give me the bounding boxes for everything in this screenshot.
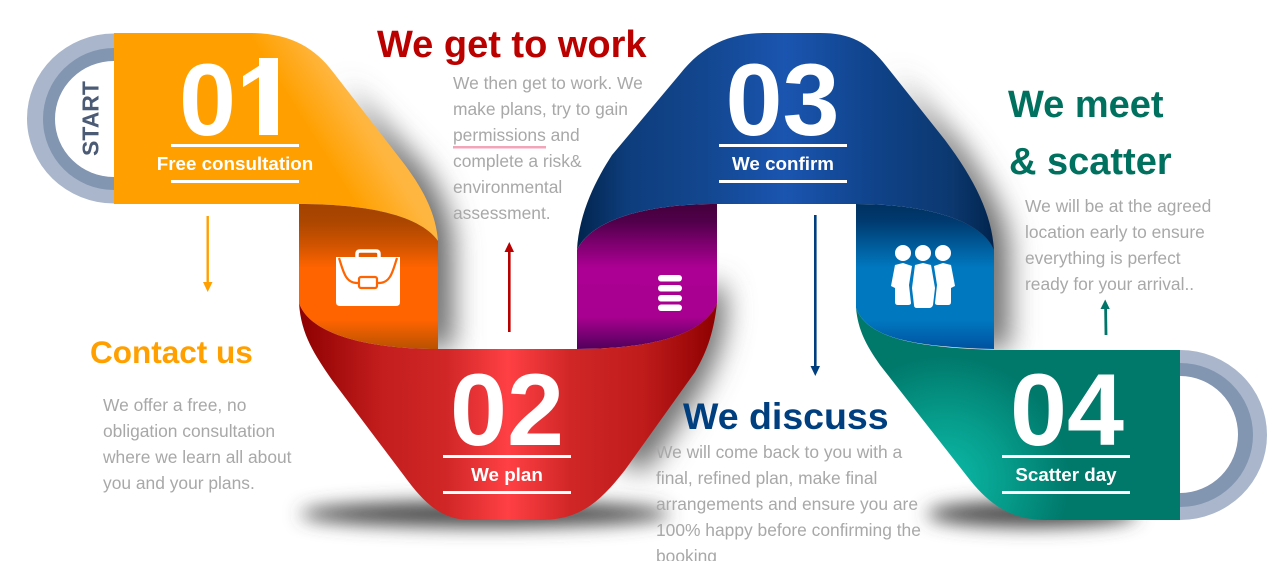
icon: list: [658, 275, 682, 311]
text: contact us body: [102, 395, 292, 493]
heading: we meet & scatter: We meet: [1008, 84, 1164, 126]
text: we get to work body: [453, 73, 643, 223]
text: we meet body: location early to ensure: [1025, 222, 1205, 242]
label: we confirm: We confirm: [732, 153, 834, 174]
number: 01: 01: [179, 42, 293, 157]
heading: contact us: Contact us: [90, 334, 253, 370]
text: contact us body: where we learn all about: [102, 447, 292, 467]
label: start: START: [78, 81, 104, 156]
band: 01 orange: [114, 33, 438, 241]
text: we get to work body: complete a risk&: [453, 151, 582, 171]
fold: blue with people icon: [856, 204, 994, 349]
text: we discuss body: final, refined plan, make final: [656, 468, 877, 488]
numeral one: plain stem: [238, 58, 296, 136]
text: we get to work body: assessment.: [453, 203, 551, 223]
heading: we discuss: We discuss: [683, 395, 889, 437]
heading: we meet & scatter: & scatter: [1009, 141, 1172, 183]
text: contact us body: obligation consultation: [103, 421, 275, 441]
text: we discuss body: arrangements and ensure you are: [656, 494, 918, 514]
arrow: red up: [504, 242, 514, 332]
heading: we meet & scatter: [1008, 84, 1172, 183]
rule: [443, 491, 571, 494]
rule: [1002, 455, 1130, 458]
rule: [719, 180, 847, 183]
label: free consultation: Free consultation: [157, 153, 313, 174]
text: we discuss body: [656, 442, 921, 561]
band: 03 blue: [577, 33, 994, 250]
text: contact us body: you and your plans.: [103, 473, 255, 493]
band: 02 red: [299, 303, 717, 520]
text: we meet body: [1025, 196, 1211, 294]
text: we meet body: everything is perfect: [1025, 248, 1181, 268]
fold: purple with list icon: [577, 204, 717, 349]
text: we get to work body: We then get to work. We: [453, 73, 643, 93]
label: we plan: We plan: [471, 464, 543, 485]
arrow: teal up: [1100, 300, 1110, 335]
text: we discuss body: 100% happy before confirming the: [656, 520, 921, 540]
heading: we get to work: We get to work: [377, 24, 647, 66]
icon: people: [891, 245, 955, 308]
band: 04 teal: [856, 308, 1180, 520]
text: we get to work body: environmental: [453, 177, 562, 197]
rule: [171, 180, 299, 183]
rule: [1002, 491, 1130, 494]
arrow: blue down: [810, 215, 820, 376]
underline: permissions: [453, 146, 546, 148]
number: 03: 03: [726, 42, 840, 157]
text: we discuss body: We will come back to you with a: [656, 442, 902, 462]
icon: briefcase: [336, 251, 400, 306]
text: we get to work body: permissions and: [453, 125, 580, 145]
text: we get to work body: make plans, try to gain: [453, 99, 628, 119]
rule: [443, 455, 571, 458]
text: we meet body: We will be at the agreed: [1025, 196, 1211, 216]
fold: orange with briefcase: [299, 204, 438, 349]
ring: end: [1180, 350, 1267, 520]
label: scatter day: Scatter day: [1015, 464, 1117, 485]
number: 02: 02: [450, 352, 564, 467]
rule: [171, 144, 299, 147]
drop shadows: [345, 75, 1009, 472]
text: contact us body: We offer a free, no: [103, 395, 246, 415]
number: 04: 04: [1010, 352, 1124, 467]
rule: [719, 144, 847, 147]
ring: start: [27, 34, 114, 204]
text: we meet body: ready for your arrival..: [1025, 274, 1194, 294]
arrow: orange down: [203, 216, 212, 292]
